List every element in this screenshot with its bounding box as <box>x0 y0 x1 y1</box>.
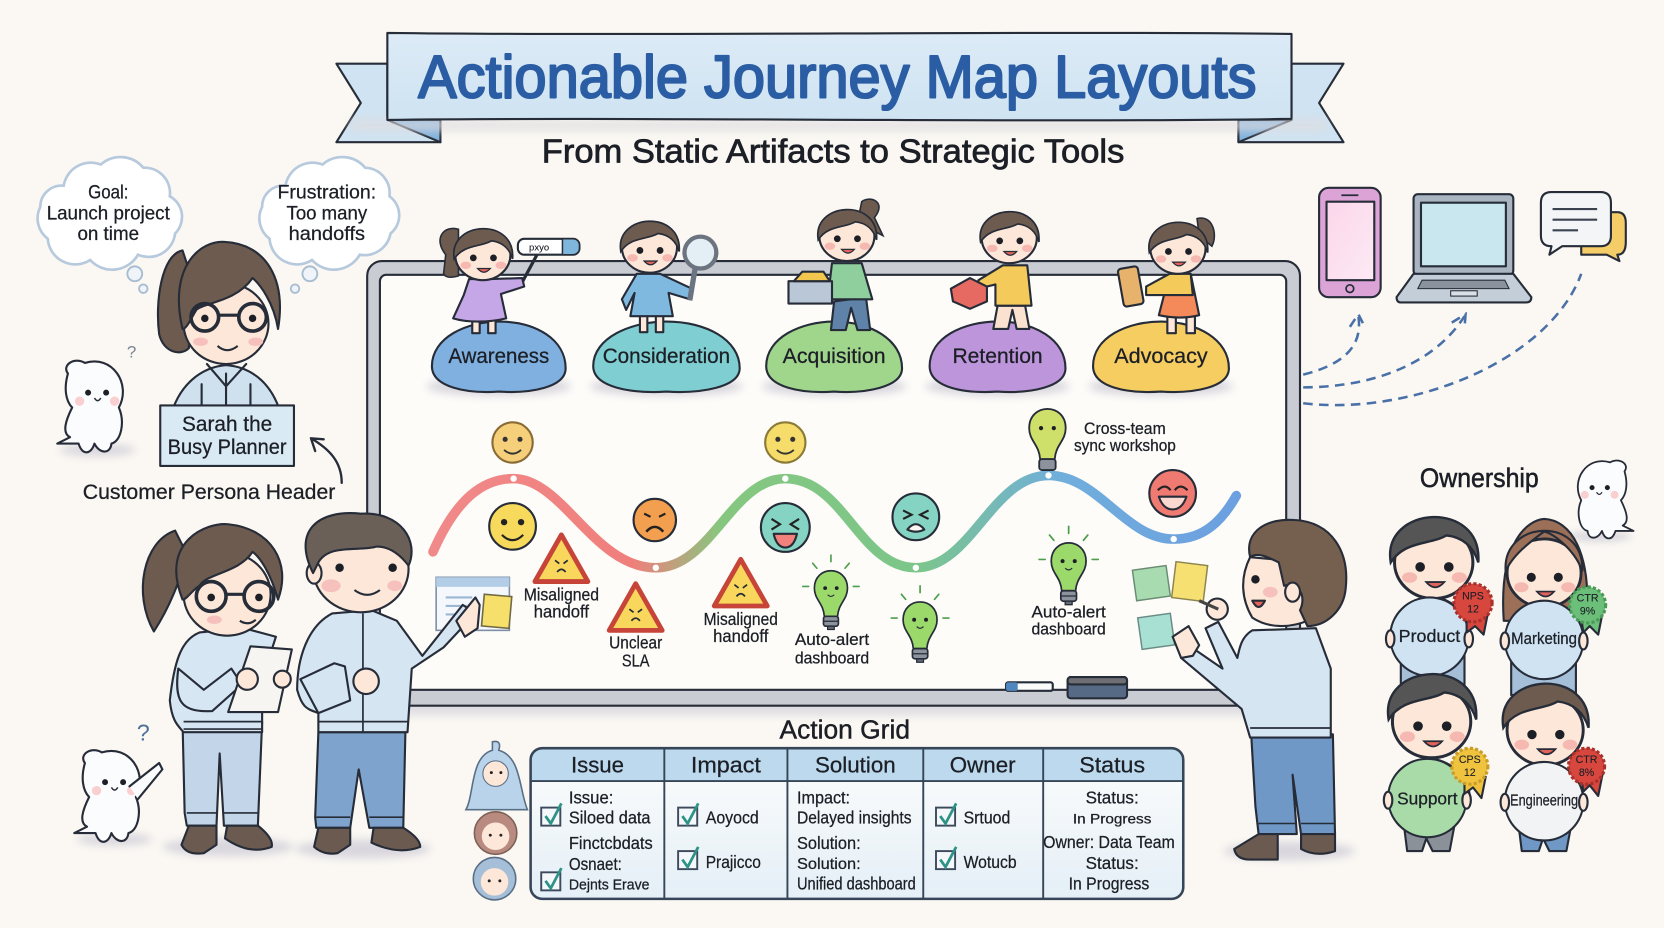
owner: Product <box>1386 517 1492 695</box>
kid: searching: pxyo <box>529 242 549 253</box>
tray marker and eraser <box>1006 677 1127 698</box>
owner column: Srtuod <box>964 808 1010 828</box>
kid: shopping box <box>788 199 883 330</box>
persona header label: Customer Persona Header <box>83 481 335 504</box>
status column: Status: <box>1086 787 1139 807</box>
avatar: blue cap <box>473 857 516 900</box>
solution column: Solution: <box>797 856 861 873</box>
subtitle: From Static Artifacts to Strategic Tools <box>542 132 1124 169</box>
idea: auto-alert dashboard 1: dashboard <box>795 648 869 667</box>
table header: Status <box>1079 753 1145 778</box>
warning: misaligned handoff 1: Misaligned <box>524 585 599 605</box>
solution column: Solution: <box>797 833 861 853</box>
title: Actionable Journey Map Layouts <box>418 43 1256 111</box>
issue column: Siloed data <box>569 808 651 828</box>
issue column: Issue: <box>569 787 613 807</box>
idea: cross-team sync workshop: sync workshop <box>1074 437 1176 455</box>
warning: unclear SLA: SLA <box>622 650 650 670</box>
status column: In Progress <box>1073 812 1152 827</box>
mascot: ownership <box>1567 460 1634 542</box>
badge CTR green: 9% <box>1580 605 1596 617</box>
badge CTR green <box>1570 587 1606 635</box>
impact column <box>678 803 761 872</box>
owner column: Wotucb <box>964 852 1017 872</box>
stage: Acquisition: Acquisition <box>783 345 886 368</box>
thought cloud: goal: Launch project <box>47 204 170 225</box>
idea: bulb <box>891 586 949 662</box>
avatar: pink hair <box>474 812 517 854</box>
solution column: Impact: <box>797 787 850 807</box>
impact column: Prajicco <box>706 852 761 872</box>
arrow: board to phone <box>1303 314 1365 375</box>
owner: Support: Support <box>1397 788 1458 808</box>
persona name card: Sarah the <box>182 413 272 436</box>
status column: Status: <box>1086 853 1139 873</box>
kid: gift box <box>951 212 1039 329</box>
stage: Retention: Retention <box>952 345 1043 368</box>
status column: Owner: Data Team <box>1043 832 1175 852</box>
journey emotion curve <box>433 472 1236 571</box>
stage: Consideration <box>590 221 743 396</box>
idea: auto-alert dashboard 2: Auto-alert <box>1032 603 1106 622</box>
channel icon: laptop <box>1397 194 1531 302</box>
solution column <box>797 787 916 893</box>
mascot: pointing <box>74 720 162 846</box>
man at board, back view <box>1173 520 1355 861</box>
channel icon: chat bubbles <box>1541 192 1626 261</box>
warning: misaligned handoff 2: handoff <box>713 626 768 646</box>
mascot: top left: ? <box>127 343 136 362</box>
badge gold: CPS <box>1459 754 1481 766</box>
stage: Consideration: Consideration <box>603 345 730 368</box>
stage: Retention <box>925 212 1070 396</box>
mascot: top left <box>57 343 136 456</box>
avatar: blue hood <box>466 741 527 810</box>
stage: Awareness: Awareness <box>448 345 549 368</box>
thought cloud: frustration <box>259 157 399 293</box>
solution column: Unified dashboard <box>797 873 916 893</box>
action grid table <box>531 748 1183 899</box>
action grid title: Action Grid <box>779 717 910 745</box>
badge gold <box>1452 748 1488 798</box>
kid: magnifier <box>620 221 716 332</box>
issue column: Osnaet: <box>569 854 622 874</box>
emoji: upset <box>892 493 939 540</box>
title banner <box>336 33 1344 142</box>
kid: searching <box>440 228 579 333</box>
idea: auto-alert dashboard 1 <box>795 555 869 667</box>
issue column: Finctcbdats <box>569 833 653 853</box>
idea: auto-alert dashboard 1: Auto-alert <box>795 630 869 649</box>
badge CTR red: 8% <box>1579 767 1595 779</box>
table header: Owner <box>950 753 1016 778</box>
badge CTR red: CTR <box>1576 754 1598 766</box>
kid: phone <box>1117 218 1214 333</box>
badge NPS: NPS <box>1462 591 1484 603</box>
warning: misaligned handoff 2: Misaligned <box>704 609 778 629</box>
emoji: laughing <box>761 503 810 552</box>
issue column: Dejnts Erave <box>569 877 649 893</box>
warning: misaligned handoff 2 <box>704 559 778 646</box>
idea: auto-alert dashboard 2: dashboard <box>1032 620 1106 639</box>
table header <box>571 753 1145 778</box>
owner: Engineering <box>1501 684 1605 851</box>
issue column <box>541 787 653 893</box>
solution column: Delayed insights <box>797 808 912 828</box>
stage: Acquisition <box>762 199 906 396</box>
thought cloud: frustration: Frustration: <box>278 182 376 203</box>
status column: In Progress <box>1069 873 1150 893</box>
thought cloud: frustration: handoffs <box>289 224 365 245</box>
whiteboard <box>367 261 1300 715</box>
owner: Marketing <box>1501 519 1606 695</box>
idea: cross-team sync workshop <box>1029 409 1176 470</box>
stage: Awareness <box>427 228 579 396</box>
warning: unclear SLA <box>609 584 662 670</box>
emoji: red grin <box>1149 470 1196 517</box>
warning: misaligned handoff 1: handoff <box>534 602 589 622</box>
table header: Issue <box>571 753 624 778</box>
emoji: top smile 1 <box>492 422 533 463</box>
status column <box>1043 787 1175 893</box>
arrow: board to laptop <box>1303 314 1466 387</box>
owner: Marketing: Marketing <box>1511 630 1577 648</box>
thought cloud: goal: on time <box>77 224 139 245</box>
emoji: sad <box>634 499 676 541</box>
impact column: Aoyocd <box>706 808 759 828</box>
badge gold: 12 <box>1464 767 1476 779</box>
thought cloud: goal <box>38 157 182 293</box>
owner: Engineering: Engineering <box>1510 792 1578 809</box>
table header: Impact <box>691 753 762 778</box>
sticky notes <box>1132 562 1208 649</box>
owner: Product: Product <box>1399 626 1460 646</box>
persona name card: Busy Planner <box>168 436 287 459</box>
thought cloud: frustration: Too many <box>287 204 368 225</box>
arrow to persona card <box>311 438 342 483</box>
idea: auto-alert dashboard 2 <box>1032 526 1106 639</box>
warning: unclear SLA: Unclear <box>609 632 662 652</box>
mascot: pointing: ? <box>137 720 150 746</box>
channel icon: phone <box>1319 188 1381 297</box>
badge CTR red <box>1568 748 1605 796</box>
arrow: board to chat <box>1303 274 1581 405</box>
emoji: happy <box>489 503 536 550</box>
owner: Support <box>1384 674 1488 851</box>
idea: cross-team sync workshop: Cross-team <box>1084 420 1166 438</box>
ownership heading: Ownership <box>1420 463 1539 493</box>
stage: Advocacy <box>1089 218 1233 396</box>
badge CTR green: CTR <box>1577 593 1599 605</box>
badge NPS: 12 <box>1467 603 1479 615</box>
warning: misaligned handoff 1 <box>524 535 599 622</box>
owner column <box>936 803 1017 872</box>
persona: Sarah bust <box>158 242 282 419</box>
stage: Advocacy: Advocacy <box>1114 345 1208 368</box>
persona name card <box>160 405 294 466</box>
man pointing at board <box>295 513 480 859</box>
thought cloud: goal: Goal: <box>88 182 128 203</box>
dashboard sheet and note <box>436 577 512 630</box>
table header: Solution <box>815 753 896 778</box>
badge NPS <box>1454 584 1492 635</box>
emoji: top smile 2 <box>765 422 805 463</box>
woman with clipboard <box>143 524 294 856</box>
